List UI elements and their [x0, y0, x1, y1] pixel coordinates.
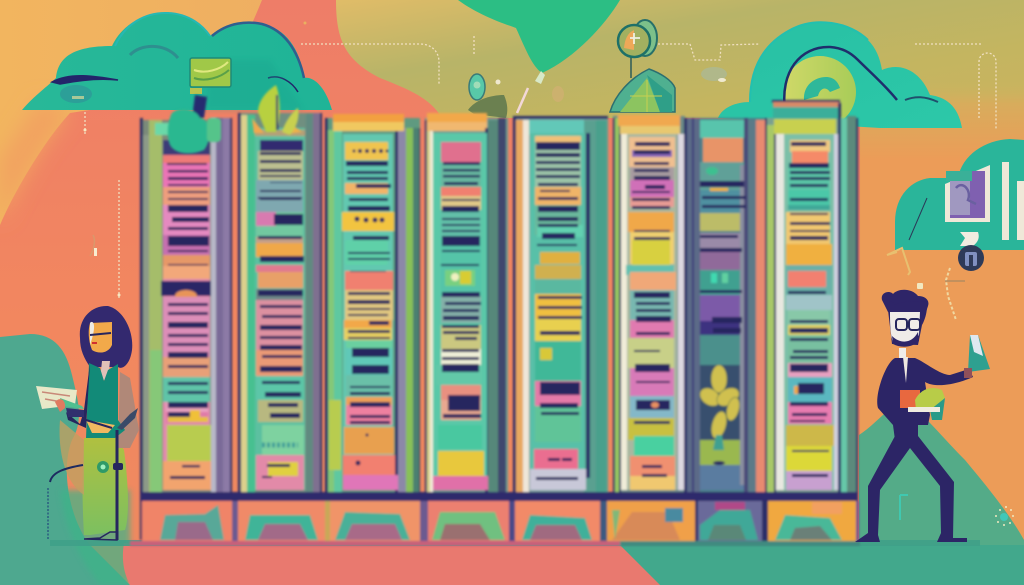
icon: teal blob and stem on rack one [168, 95, 221, 153]
balloon: green top shape [458, 0, 620, 113]
base plinth [130, 492, 860, 546]
cloud: right edge with chart [887, 139, 1024, 320]
icon: yellow plant on rack two [252, 85, 302, 135]
icon: crystal house above rack six [610, 69, 675, 112]
rack 8 [767, 100, 858, 492]
icon: green screen on left cloud [190, 58, 231, 94]
cloud: upper right [718, 22, 962, 128]
cloud: left [22, 13, 332, 110]
dotted circuit lines [85, 36, 996, 300]
person: man with glasses holding a phone [855, 290, 1014, 542]
icon: globe on stem [552, 20, 727, 102]
ambient sparks [84, 22, 306, 296]
rack 5 [513, 116, 608, 492]
person: woman holding a paper [36, 306, 139, 540]
rack 6 [613, 115, 687, 492]
rack 7 [687, 118, 767, 492]
icon: green capsule above rack four [468, 74, 507, 118]
rack row [130, 100, 860, 546]
rack 2 [238, 113, 322, 492]
rack 3 [325, 114, 420, 492]
rack 4 [425, 113, 508, 492]
rack 1 [140, 118, 232, 492]
